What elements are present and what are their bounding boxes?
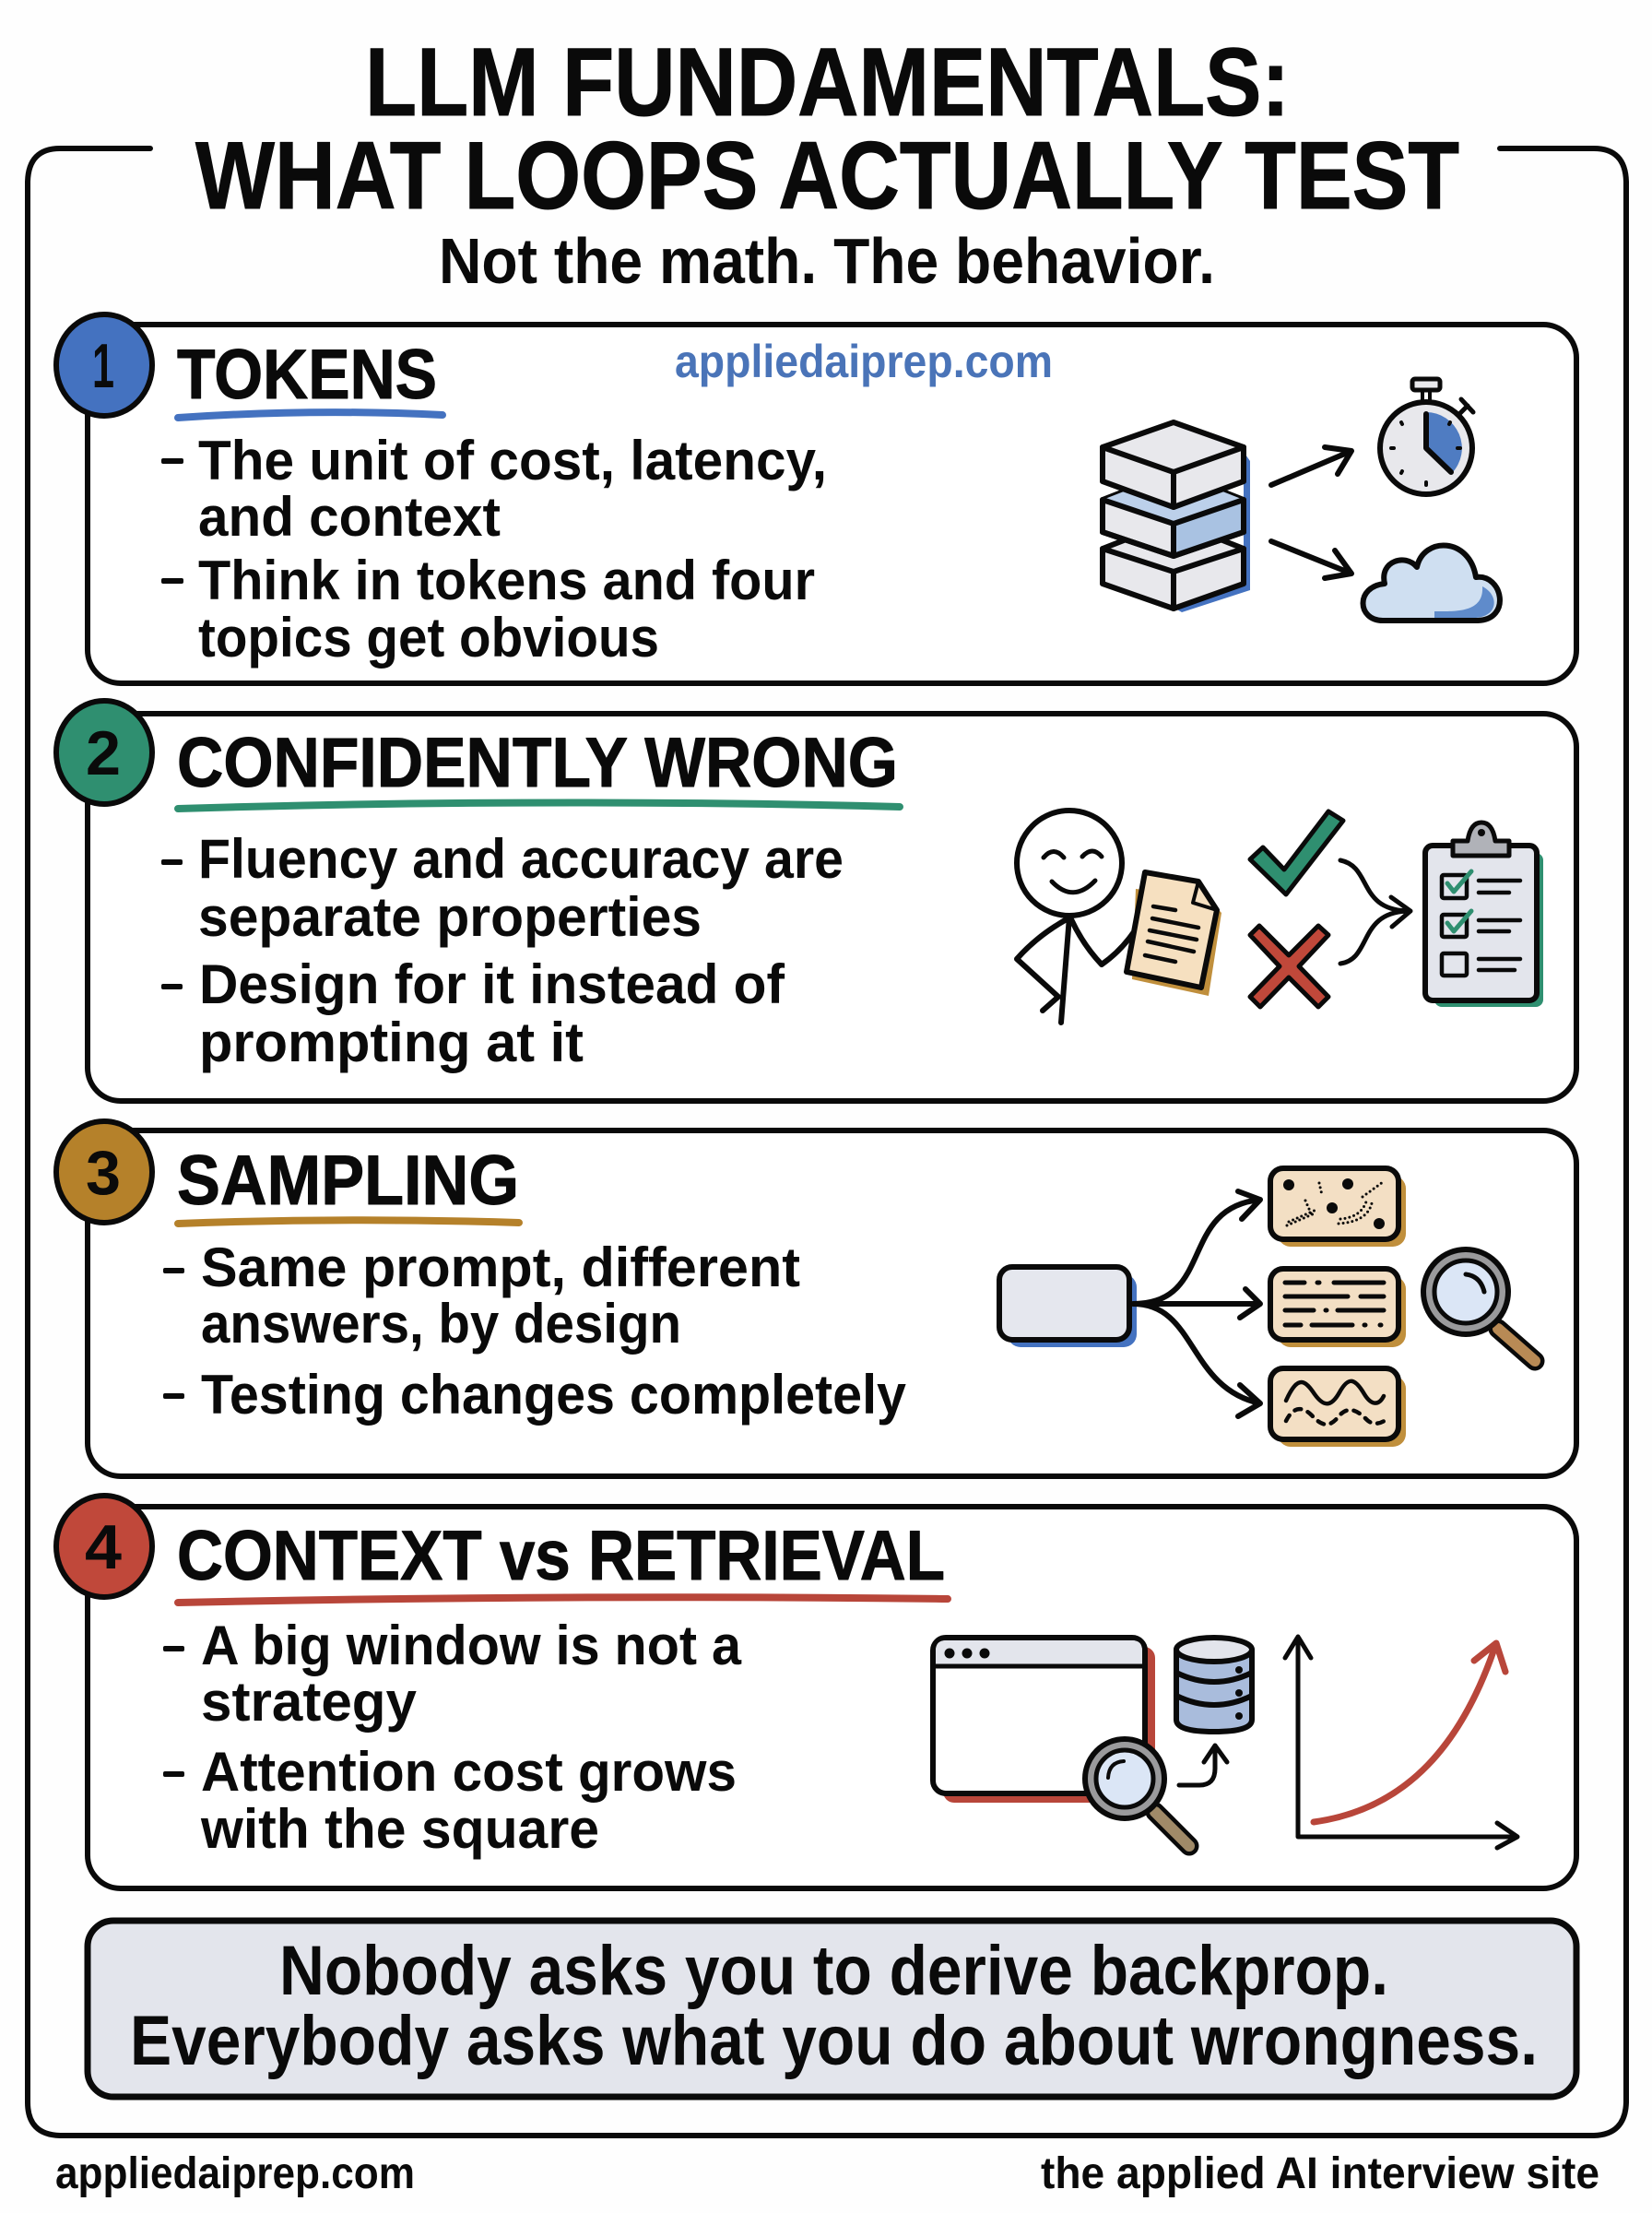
callout: takeaway: Nobody asks you to derive backprop. <box>279 1932 1388 2010</box>
heading: tokens: TOKENS <box>177 336 437 414</box>
heading: confidently wrong: CONFIDENTLY WRONG <box>177 724 898 802</box>
site link: appliedaiprep.com <box>675 336 1053 387</box>
title: LLM FUNDAMENTALS: <box>365 29 1290 136</box>
bullets <box>161 828 844 1073</box>
icon: magnifying glass <box>1423 1249 1535 1361</box>
icon: smiling stick figure <box>1017 811 1133 1023</box>
bullets: A big window is not a <box>201 1615 742 1676</box>
icon: stopwatch <box>1380 379 1473 494</box>
panel: context vs retrieval <box>56 1496 1576 1888</box>
bullets: with the square <box>200 1798 599 1860</box>
card outline <box>88 325 1576 683</box>
bullets <box>161 430 827 669</box>
number badge 1 <box>56 314 152 416</box>
bullets: answers, by design <box>201 1293 681 1355</box>
heading: context vs retrieval: CONTEXT vs RETRIEVAL <box>177 1517 945 1595</box>
panel: confidently wrong <box>56 701 1576 1101</box>
icon: database <box>1176 1638 1252 1732</box>
branching arrows <box>1133 1191 1260 1416</box>
callout: takeaway <box>88 1921 1576 2097</box>
footer: site: appliedaiprep.com <box>55 2149 415 2198</box>
bullets <box>163 1237 907 1426</box>
icon: output text card <box>1270 1269 1406 1347</box>
underline <box>178 412 442 418</box>
icon: red x <box>1250 926 1328 1007</box>
icon: cloud <box>1363 545 1500 621</box>
arrows merging <box>1340 860 1410 964</box>
footer: tagline: the applied AI interview site <box>1041 2149 1599 2198</box>
number badge 4 <box>56 1496 152 1597</box>
number badge 2: 2 <box>86 718 121 788</box>
underline <box>178 802 900 809</box>
bullets: Design for it instead of <box>199 953 785 1015</box>
panel: sampling <box>56 1121 1576 1476</box>
chart: quadratic growth <box>1285 1637 1517 1848</box>
icon: check mark <box>1250 811 1343 894</box>
number badge 3 <box>56 1121 152 1223</box>
underline <box>178 1220 519 1224</box>
title <box>195 29 1459 230</box>
icon: magnifying glass over window <box>1085 1739 1189 1846</box>
bullets: strategy <box>201 1671 418 1733</box>
arrow to database <box>1179 1746 1227 1785</box>
card outline <box>88 1507 1576 1888</box>
underline <box>178 1597 948 1603</box>
bullets: The unit of cost, latency, <box>198 430 827 491</box>
subtitle: Not the math. The behavior. <box>439 225 1215 297</box>
bullets: Same prompt, different <box>201 1237 800 1298</box>
icon: context window <box>933 1638 1155 1803</box>
icon: clipboard <box>1425 822 1543 1007</box>
bullets: and context <box>198 486 501 548</box>
card outline <box>88 1130 1576 1476</box>
icon: prompt box <box>999 1267 1137 1347</box>
bullets: separate properties <box>198 886 702 948</box>
bullets <box>163 1615 742 1860</box>
arrow to stopwatch <box>1271 447 1351 485</box>
number badge 2 <box>56 701 152 804</box>
panel: tokens <box>56 314 1576 683</box>
bullets: Fluency and accuracy are <box>198 828 844 890</box>
icon: token blocks <box>1103 422 1250 612</box>
bullets: topics get obvious <box>198 607 659 669</box>
icon: output wave card <box>1270 1368 1406 1447</box>
icon: output dots card <box>1270 1168 1406 1247</box>
bullets: prompting at it <box>199 1012 584 1073</box>
number badge 4: 4 <box>85 1512 122 1582</box>
title: WHAT LOOPS ACTUALLY TEST <box>195 123 1459 230</box>
card outline <box>88 714 1576 1101</box>
bullets: Testing changes completely <box>201 1364 907 1426</box>
bullets: Attention cost grows <box>201 1741 737 1803</box>
number badge 3: 3 <box>86 1138 121 1208</box>
arrow to cloud <box>1271 541 1351 578</box>
number badge 1: 1 <box>92 331 114 401</box>
heading: sampling: SAMPLING <box>177 1142 519 1220</box>
icon: document <box>1127 872 1221 996</box>
bullets: Think in tokens and four <box>198 550 815 611</box>
